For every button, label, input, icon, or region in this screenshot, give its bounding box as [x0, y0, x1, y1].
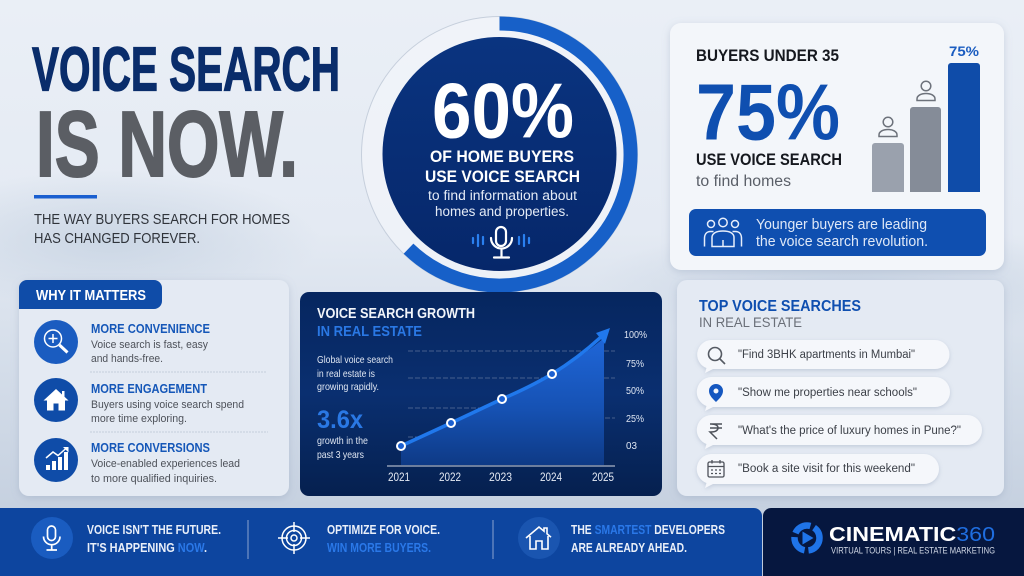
bar chart: 75%: [949, 44, 979, 59]
x axis labels: 2023: [489, 472, 512, 484]
stat caption: growth in the: [317, 435, 368, 447]
footer item: smartest developers: ARE ALREADY AHEAD.: [571, 541, 687, 555]
y axis labels: [624, 330, 647, 452]
heading: VOICE SEARCH GROWTH: [317, 306, 475, 322]
search bubble 4: [697, 454, 939, 488]
footer item: voice is now: [31, 517, 221, 559]
y axis labels: 100%: [624, 330, 647, 341]
brand name: CINEMATIC 360: [829, 524, 995, 546]
heading: [699, 298, 861, 330]
title: [32, 36, 340, 196]
search bubble 3: "What's the price of luxury homes in Pune?": [738, 425, 961, 437]
footer item: voice is now: IT'S HAPPENING NOW.: [87, 541, 207, 555]
item: more engagement: MORE ENGAGEMENT: [91, 382, 207, 396]
item: more conversions: [34, 438, 240, 485]
footer item: optimize: WIN MORE BUYERS.: [327, 541, 431, 555]
heading: [317, 306, 475, 340]
stat caption: OF HOME BUYERS: [430, 148, 574, 166]
subtitle: THE WAY BUYERS SEARCH FOR HOMES: [34, 212, 290, 228]
heading: IN REAL ESTATE: [317, 324, 422, 340]
title: IS NOW.: [36, 92, 298, 196]
accent rule: [34, 195, 97, 198]
item: more conversions: MORE CONVERSIONS: [91, 441, 210, 455]
heading tab: [19, 280, 162, 309]
x axis labels: 2022: [439, 472, 461, 484]
panel: why it matters: [19, 280, 289, 496]
description: growing rapidly.: [317, 381, 379, 393]
footer item: optimize: [278, 522, 440, 555]
panel: voice search growth: [300, 292, 662, 496]
item: more engagement: more time exploring.: [91, 413, 187, 425]
stat caption: past 3 years: [317, 449, 364, 461]
footer item: optimize: OPTIMIZE FOR VOICE.: [327, 523, 440, 537]
icon: group of people: [704, 218, 742, 246]
icon: person small: [879, 117, 897, 136]
subtitle: [34, 212, 290, 247]
panel: buyers under 35: [670, 23, 1004, 270]
footer item: smartest developers: [518, 517, 725, 559]
stat caption: USE VOICE SEARCH: [425, 168, 580, 186]
search bubble 1: "Find 3BHK apartments in Mumbai": [738, 349, 915, 361]
y axis labels: 25%: [626, 414, 644, 425]
x axis labels: [388, 472, 614, 484]
icon: person medium: [917, 81, 935, 100]
heading: BUYERS UNDER 35: [696, 47, 839, 65]
heading tab: WHY IT MATTERS: [36, 288, 146, 304]
search bubble 1: [697, 340, 950, 373]
item: more convenience: and hands-free.: [91, 353, 163, 365]
panel: top voice searches: [677, 280, 1004, 496]
stat: 75%: 75%: [696, 68, 840, 156]
stat caption: [425, 148, 580, 186]
line chart: [387, 328, 647, 484]
dark disc: [382, 37, 616, 271]
stat caption: [317, 435, 368, 461]
description: Global voice search: [317, 354, 393, 366]
item: more conversions: Voice-enabled experiences lead: [91, 458, 240, 470]
item: more conversions: to more qualified inquiries.: [91, 473, 217, 485]
stat caption: USE VOICE SEARCH: [696, 151, 842, 169]
callout: younger buyers: [689, 209, 986, 256]
heading: IN REAL ESTATE: [699, 315, 802, 330]
stat description: [428, 188, 577, 219]
icon: logo aperture: [794, 526, 820, 550]
callout: younger buyers: the voice search revolution.: [756, 234, 928, 250]
item: more convenience: MORE CONVENIENCE: [91, 322, 210, 336]
heading: TOP VOICE SEARCHES: [699, 298, 861, 315]
y axis labels: 50%: [626, 386, 644, 397]
footer item: voice is now: VOICE ISN'T THE FUTURE.: [87, 523, 221, 537]
subtitle: HAS CHANGED FOREVER.: [34, 231, 200, 247]
y axis labels: 75%: [626, 359, 644, 370]
panel: brand logo: [763, 508, 1024, 576]
brand tagline: VIRTUAL TOURS | REAL ESTATE MARKETING: [831, 546, 995, 556]
icon: microphone with sound waves: [473, 227, 529, 258]
callout: younger buyers: Younger buyers are leading: [756, 217, 927, 233]
x axis labels: 2021: [388, 472, 410, 484]
item: more engagement: Buyers using voice search spend: [91, 399, 244, 411]
stat: 60%: 60%: [432, 66, 574, 154]
search bubble 2: [697, 377, 950, 411]
description: [317, 354, 393, 393]
footer bar: [0, 508, 762, 576]
stat description: to find information about: [428, 188, 577, 203]
search bubble 4: "Book a site visit for this weekend": [738, 463, 915, 475]
title: VOICE SEARCH: [32, 36, 340, 104]
bar chart: [872, 44, 980, 192]
stat description: homes and properties.: [435, 204, 569, 219]
item: more convenience: Voice search is fast, easy: [91, 339, 208, 351]
item: more convenience: [34, 320, 210, 365]
progress ring: [408, 23, 631, 285]
description: in real estate is: [317, 368, 375, 380]
stat description: to find homes: [696, 173, 791, 190]
x axis labels: 2024: [540, 472, 563, 484]
search bubble 2: "Show me properties near schools": [738, 387, 917, 399]
item: more engagement: [34, 378, 244, 425]
y axis labels: 03: [626, 441, 637, 452]
search bubble 3: [697, 415, 982, 449]
panel: 60% stat circle: [362, 16, 638, 292]
x axis labels: 2025: [592, 472, 614, 484]
footer item: smartest developers: THE SMARTEST DEVELOPERS: [571, 523, 725, 537]
stat: 3.6x: 3.6x: [317, 406, 363, 434]
